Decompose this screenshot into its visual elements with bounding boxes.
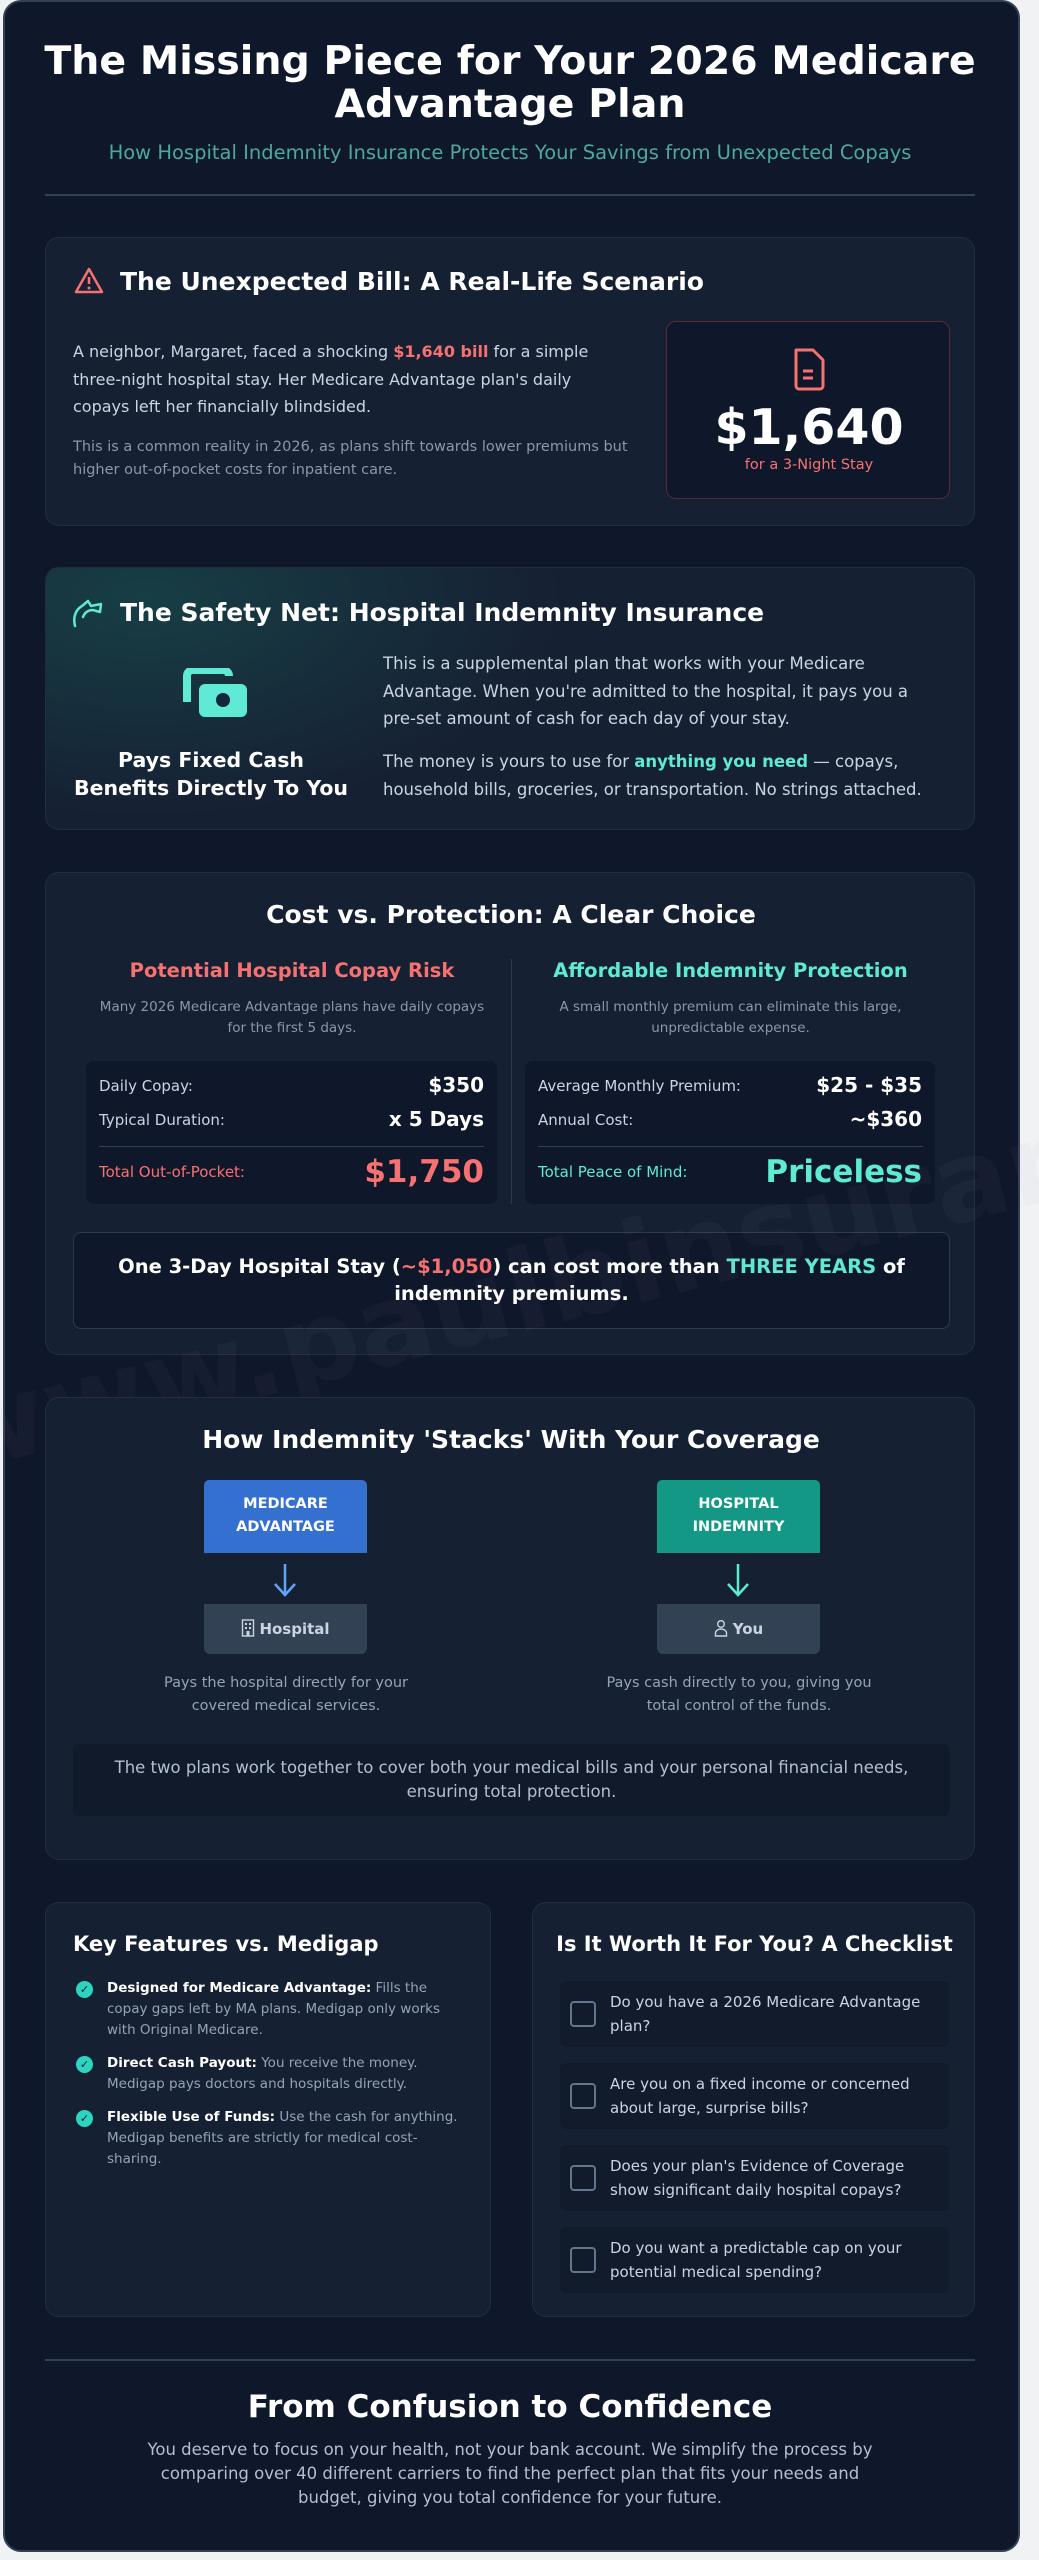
- heading: Is It Worth It For You? A Checklist: [556, 1932, 953, 1956]
- table: protection: $25 - $35: [816, 1073, 922, 1097]
- arrow: [274, 1564, 296, 1597]
- panel: key features: [45, 1902, 491, 2317]
- table: risk: [86, 1061, 497, 1204]
- title: Advantage Plan: [334, 81, 686, 127]
- column: copay risk: for the first 5 days.: [227, 1020, 356, 1036]
- column: copay risk: Potential Hospital Copay Risk: [130, 959, 454, 982]
- footer text: [147, 2440, 872, 2507]
- flow: hospital indemnity: Pays cash directly to you, giving you: [606, 1675, 872, 1691]
- column: indemnity protection: unpredictable expense.: [651, 1020, 810, 1036]
- list: features: ✓: [80, 2112, 89, 2125]
- table: protection: ~$360: [850, 1107, 922, 1131]
- panel: safety net: household bills, groceries, or transportation. No strings attached.: [383, 780, 922, 798]
- table: protection: Annual Cost:: [538, 1111, 633, 1129]
- footer text: You deserve to focus on your health, not your bank account. We simplify the process by: [147, 2440, 872, 2459]
- text: pays fixed cash: [74, 748, 348, 800]
- box: hospital: [204, 1604, 367, 1654]
- flow: hospital indemnity: total control of the funds.: [647, 1698, 831, 1714]
- text: summary: ensuring total protection.: [407, 1782, 616, 1801]
- list: checklist items: Are you on a fixed income or concerned about large, surprise bills?: [610, 2075, 910, 2117]
- text: summary: [73, 1744, 950, 1816]
- list: features: ✓: [80, 1983, 89, 1996]
- panel: stacks: [45, 1397, 975, 1860]
- panel: unexpected bill: [45, 237, 975, 526]
- text: story: A neighbor, Margaret, faced a shocking $1,640 bill for a simple three-night hospital stay. Her Medicare Advantage plan's daily copays left her financially blindsided.: [73, 342, 588, 416]
- list: checklist items: [570, 1993, 920, 2281]
- list: features: Flexible Use of Funds: Use the cash for anything. Medigap benefits are strictly for medical cost-: [107, 2109, 458, 2146]
- icon: document: [794, 348, 824, 390]
- list: features: Designed for Medicare Advantage: Fills the copay gaps left by MA plans. Medigap only works with Original Medicare.: [107, 1980, 440, 2038]
- table: protection: Total Peace of Mind:: [538, 1163, 687, 1181]
- text: pays fixed cash: Pays Fixed Cash: [118, 748, 304, 772]
- text: description: Advantage. When you're admitted to the hospital, it pays you a: [383, 682, 908, 700]
- panel: cost vs protection: [45, 872, 975, 1355]
- icon: cash: [183, 668, 247, 717]
- heading: How Indemnity 'Stacks' With Your Coverage: [202, 1425, 820, 1454]
- table: risk: Typical Duration:: [99, 1111, 225, 1129]
- table: risk: Daily Copay:: [99, 1077, 193, 1095]
- flow: medicare advantage: covered medical services.: [192, 1698, 380, 1714]
- list: features: Direct Cash Payout: You receive the money.: [107, 2055, 418, 2071]
- text: description: This is a supplemental plan that works with your Medicare: [383, 654, 865, 673]
- title: [44, 38, 976, 127]
- table: risk: $350: [428, 1073, 484, 1097]
- column: copay risk: [86, 959, 497, 1204]
- flow: hospital indemnity: [606, 1480, 872, 1714]
- panel: safety net: [45, 567, 975, 830]
- callout: comparison: [73, 1232, 950, 1329]
- column: indemnity protection: [525, 959, 935, 1204]
- box: you: You: [733, 1620, 763, 1638]
- table: protection: [525, 1061, 935, 1204]
- arrow: [727, 1564, 749, 1597]
- flow: medicare advantage: [164, 1480, 408, 1714]
- column: indemnity protection: Affordable Indemnity Protection: [553, 959, 908, 982]
- footer heading: From Confusion to Confidence: [248, 2389, 772, 2425]
- flow: medicare advantage: Pays the hospital directly for your: [164, 1675, 408, 1691]
- list: features: ✓: [80, 2058, 89, 2071]
- table: protection: Average Monthly Premium:: [538, 1077, 741, 1095]
- column: copay risk: Many 2026 Medicare Advantage plans have daily copays: [100, 999, 484, 1015]
- text: description: [382, 654, 908, 728]
- icon: warning: [74, 268, 104, 294]
- panel: checklist: [532, 1902, 975, 2317]
- column: indemnity protection: A small monthly premium can eliminate this large,: [559, 999, 902, 1015]
- number: $1,640: [714, 399, 904, 456]
- text: pays fixed cash: Benefits Directly To You: [74, 776, 348, 800]
- box: hospital: Hospital: [259, 1620, 330, 1638]
- heading: The Unexpected Bill: A Real-Life Scenario: [120, 267, 704, 296]
- list: checklist items: Do you want a predictable cap on your potential medical spending?: [610, 2239, 902, 2281]
- panel: safety net: The money is yours to use for anything you need — copays,: [383, 752, 898, 771]
- flow: hospital indemnity: INDEMNITY: [693, 1519, 784, 1535]
- list: checklist items: Do you have a 2026 Medicare Advantage plan?: [610, 1993, 920, 2035]
- text: summary: The two plans work together to cover both your medical bills and your personal financial needs,: [115, 1758, 908, 1777]
- heading: Key Features vs. Medigap: [73, 1932, 379, 1956]
- flow: hospital indemnity: HOSPITAL: [698, 1496, 779, 1512]
- footer text: budget, giving you total confidence for your future.: [298, 2488, 722, 2507]
- caption: for a 3-Night Stay: [745, 457, 873, 473]
- callout: comparison: indemnity premiums.: [394, 1282, 629, 1305]
- footer text: comparing over 40 different carriers to find the perfect plan that fits your needs and: [161, 2464, 859, 2483]
- heading: Cost vs. Protection: A Clear Choice: [266, 900, 756, 929]
- table: risk: $1,750: [364, 1154, 484, 1190]
- list: features: [76, 1980, 458, 2167]
- icon: hand: [73, 600, 102, 628]
- flow: medicare advantage: MEDICARE: [243, 1496, 328, 1512]
- heading: The Safety Net: Hospital Indemnity Insurance: [120, 598, 764, 627]
- list: checklist items: Does your plan's Evidence of Coverage show significant daily hospital copays?: [610, 2157, 904, 2199]
- list: features: sharing.: [107, 2151, 162, 2167]
- text: description: pre-set amount of cash for each day of your stay.: [383, 709, 790, 728]
- text: note: This is a common reality in 2026, as plans shift towards lower premiums but higher out-of-pocket costs for inpatient care.: [73, 439, 628, 478]
- list: features: Medigap pays doctors and hospitals directly.: [107, 2076, 407, 2092]
- title: The Missing Piece for Your 2026 Medicare: [44, 38, 976, 84]
- table: risk: x 5 Days: [389, 1107, 484, 1131]
- subtitle: How Hospital Indemnity Insurance Protects Your Savings from Unexpected Copays: [109, 141, 911, 164]
- flow: medicare advantage: ADVANTAGE: [236, 1519, 335, 1535]
- table: protection: Priceless: [765, 1154, 922, 1190]
- box: you: [657, 1604, 820, 1654]
- table: risk: Total Out-of-Pocket:: [99, 1163, 245, 1181]
- callout: comparison: One 3-Day Hospital Stay (~$1,050) can cost more than THREE YEARS of: [118, 1255, 905, 1278]
- callout: bill amount: [666, 321, 950, 499]
